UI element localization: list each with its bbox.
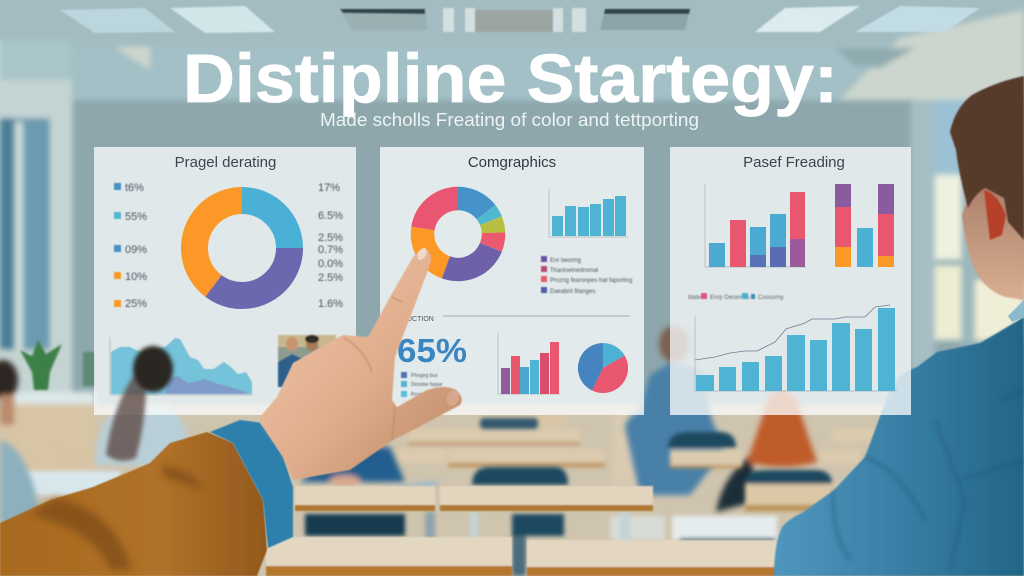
right values: 0.0%: [318, 258, 343, 270]
hand: [260, 250, 462, 480]
desks and chairs in front of students: [668, 432, 832, 511]
hair: [950, 76, 1024, 240]
sleeve folds: [30, 465, 203, 570]
purple and red bar chart: [498, 333, 560, 394]
small legend: Progre fag: [411, 392, 435, 398]
stacked bars right: [835, 184, 894, 267]
cuff: [210, 420, 293, 548]
foreground student with ponytail: [106, 346, 173, 461]
shirt folds: [833, 390, 1024, 570]
small bar chart: [549, 189, 628, 237]
photo thumbnail: [278, 335, 336, 387]
ear: [984, 190, 1006, 240]
neck and face: [962, 175, 1024, 300]
plants: [20, 340, 95, 390]
legend: [541, 256, 632, 295]
student with blue shirt: [774, 76, 1024, 576]
chairs: [305, 418, 630, 576]
right values: 17%: [318, 182, 340, 194]
pie chart: [578, 343, 628, 393]
knuckle shading: [343, 297, 402, 440]
legend: Daeabrit fitanges: [550, 289, 595, 295]
right values: 6.5%: [318, 210, 343, 222]
left legend: 25%: [125, 298, 147, 310]
segmented donut chart: [408, 184, 508, 284]
left legend: t6%: [125, 182, 144, 194]
panel heading: Pasef Freading: [743, 154, 845, 171]
ceiling lights and vents: [60, 6, 980, 33]
bar legend: blale: [688, 295, 701, 301]
area chart: [110, 337, 253, 395]
right values: 0.7%: [318, 244, 343, 256]
legend: Enr beoring: [550, 258, 581, 264]
left legend: 09%: [125, 244, 147, 256]
left legend: 55%: [125, 211, 147, 223]
front desks: [266, 486, 940, 576]
right values: [318, 182, 343, 310]
panel heading: Pragel derating: [175, 154, 276, 171]
collar: [1008, 300, 1024, 322]
right values: 2.5%: [318, 272, 343, 284]
bar legend: Coosurny: [758, 295, 784, 301]
sleeve: [0, 432, 267, 576]
legend: Prozng fearonpes hat faporting: [550, 278, 632, 284]
panel heading: Comgraphics: [468, 154, 556, 171]
bar legend: [688, 293, 784, 301]
title: Distipline Startegy:: [183, 40, 838, 117]
right values: 2.5%: [318, 232, 343, 244]
rows of desks: [20, 415, 882, 544]
big percentage: 65%: [397, 332, 467, 369]
right values: 1.6%: [318, 298, 343, 310]
thumbnail: [445, 388, 461, 408]
left legend: 10%: [125, 271, 147, 283]
pointing hand with sleeve: [0, 246, 462, 576]
bar legend: Enrp Decemes: [710, 295, 750, 301]
fingernail: [415, 246, 429, 262]
panel: comgraphics: [380, 147, 644, 415]
section label and rule: UCTION: [407, 316, 434, 323]
donut chart: [175, 181, 309, 315]
panel: program rating: [94, 147, 356, 415]
subtitle: Made scholls Freating of color and tettporting: [320, 110, 699, 130]
panel: pasef freading: [670, 147, 911, 415]
small legend: Phngeg bus: [411, 373, 438, 379]
left legend: [114, 182, 147, 310]
background students: [0, 326, 817, 525]
legend: Thanisetnedromal: [550, 268, 598, 274]
small legend: Deonbe faque: [411, 382, 443, 388]
shirt: [774, 317, 1024, 576]
grouped stacked bars left: [705, 184, 806, 267]
small legend: [401, 372, 443, 398]
bar and line chart: [695, 305, 897, 391]
